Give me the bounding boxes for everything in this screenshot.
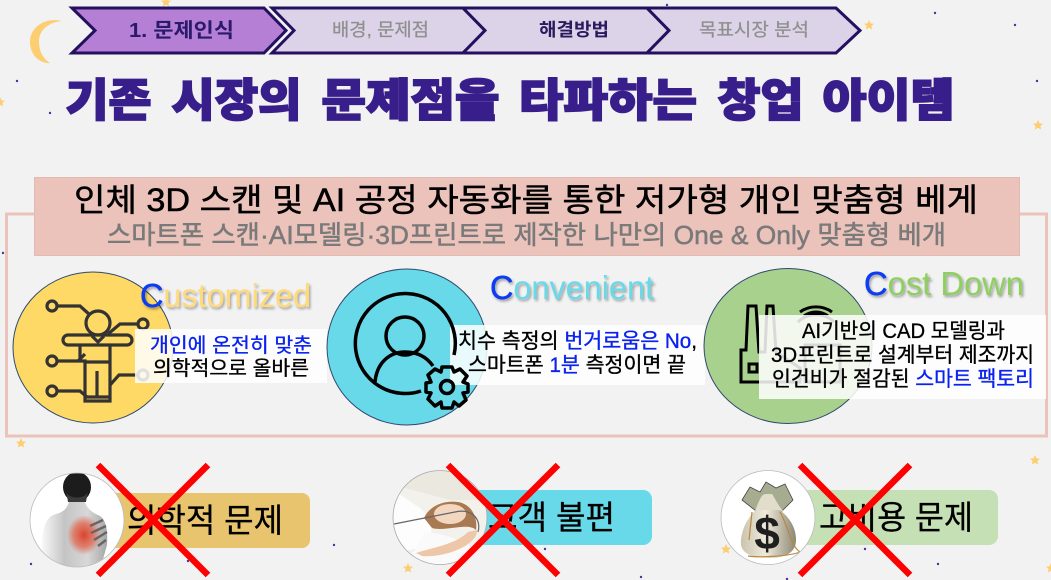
icon: crescent moon — [30, 20, 62, 63]
text box — [135, 329, 327, 383]
icon: body circuit — [13, 272, 173, 423]
sub headline: 스마트폰 스캔·AI모델링·3D프린트로 제작한 나만의 One & Only 맞춤형 베개 — [107, 220, 946, 250]
step 4 — [647, 8, 860, 53]
pill — [800, 490, 998, 545]
text box: 개인에 온전히 맞춘 — [150, 334, 312, 357]
title: 기존 — [66, 64, 152, 129]
photo: money bag: $ — [754, 507, 780, 559]
text box — [450, 325, 705, 385]
step 1: 1. 문제인식 — [129, 19, 234, 42]
label: Cost Down: Cost Down — [864, 265, 1024, 302]
panel: customized — [13, 272, 327, 423]
icon: smart factory — [704, 268, 872, 424]
step 3 — [463, 8, 669, 53]
title: 시장의 — [172, 64, 302, 129]
label: Customized: Customized — [140, 277, 311, 314]
text box: 의학적으로 올바른 — [153, 357, 309, 380]
step 1 — [72, 8, 286, 53]
text box: 3D프린트로 설계부터 제조까지 — [771, 344, 1034, 367]
label: 의학적 문제 — [127, 502, 283, 539]
label: 고객 불편 — [488, 499, 615, 536]
text box: 치수 측정의 번거로움은 No, — [458, 330, 697, 353]
pill — [100, 493, 310, 548]
text box — [759, 315, 1046, 399]
icon: user with gear — [355, 294, 468, 408]
circle: convenient — [327, 269, 487, 425]
title: 아이템 — [822, 64, 954, 129]
pill — [470, 490, 652, 545]
step 3: 해결방법 — [539, 20, 609, 40]
cross mark — [448, 465, 558, 575]
cross mark — [98, 465, 208, 575]
headline: 인체 3D 스캔 및 AI 공정 자동화를 통한 저가형 개인 맞춤형 베게 — [74, 182, 978, 218]
panel: cost down — [704, 265, 1046, 424]
photo: woman lying down — [393, 470, 487, 565]
title: 문제점을 — [322, 64, 500, 129]
text box: 스마트폰 1분 측정이면 끝 — [468, 354, 686, 377]
title: 창업 — [718, 64, 804, 129]
step 4: 목표시장 분석 — [699, 20, 809, 40]
cross mark — [800, 465, 910, 575]
photo: money bag — [721, 470, 815, 564]
problem: high cost — [721, 465, 998, 575]
step 2: 배경, 문제점 — [332, 20, 429, 40]
panel: headline banner — [34, 178, 1020, 256]
label: 고비용 문제 — [819, 499, 973, 536]
title — [66, 64, 954, 129]
panel: outer frame — [6, 214, 1046, 436]
problem: customer inconvenience — [393, 465, 652, 575]
photo: shoulder pain — [30, 472, 124, 570]
title: 타파하는 — [519, 64, 697, 129]
problem: medical — [30, 465, 310, 575]
label: Convenient: Convenient — [490, 269, 654, 306]
panel: convenient — [327, 269, 705, 425]
progress steps — [72, 8, 860, 53]
text box: AI기반의 CAD 모델링과 — [802, 320, 1005, 343]
text box: 인건비가 절감된 스마트 팩토리 — [772, 368, 1034, 391]
step 2 — [272, 8, 485, 53]
